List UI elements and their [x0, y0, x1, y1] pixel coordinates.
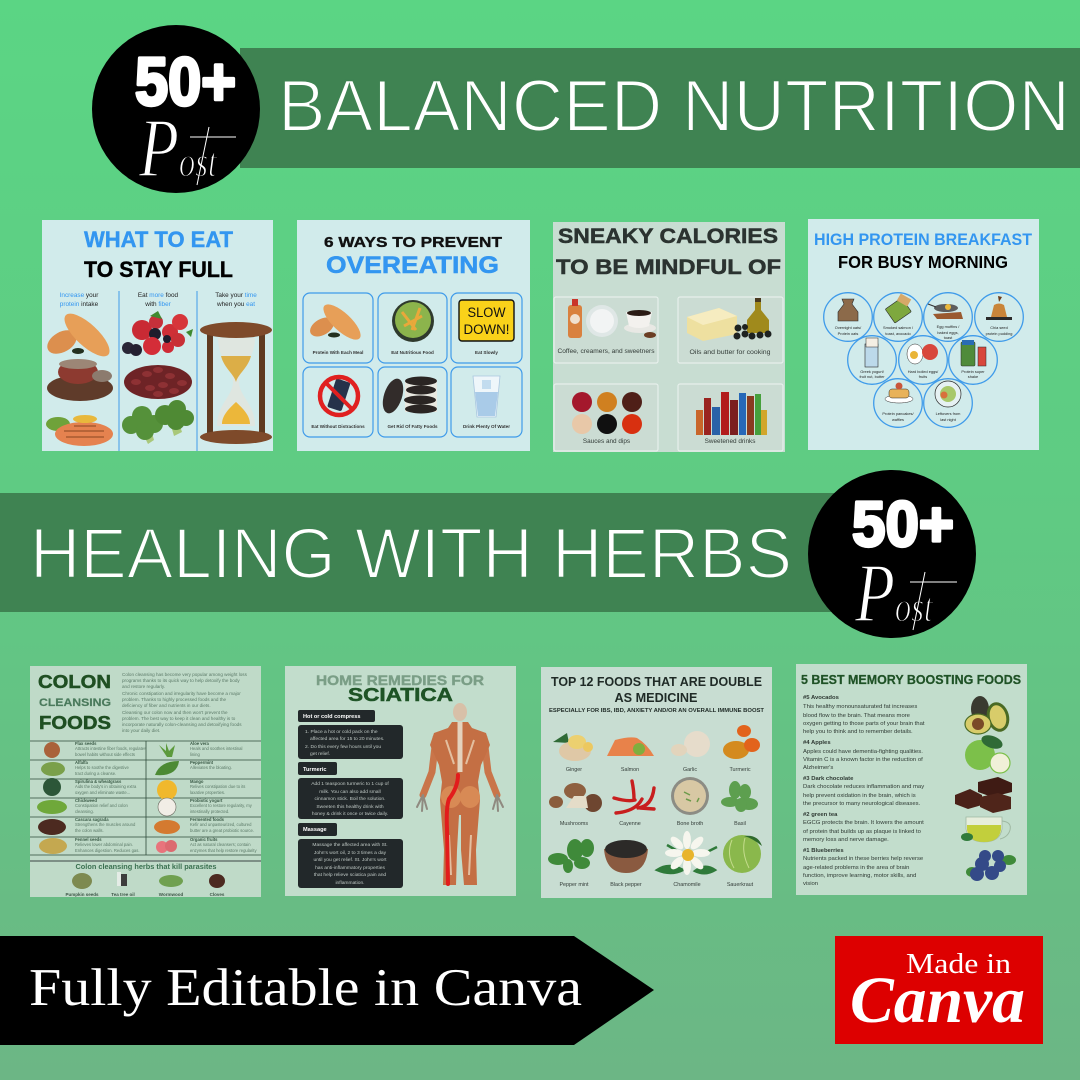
text list: help prevent oxidation in the brain, which is: [803, 793, 916, 799]
circle labels: Chia seed: [990, 325, 1008, 330]
remedy: turmeric: [298, 762, 403, 819]
heading: to stay full: TO STAY FULL: [84, 257, 233, 282]
text list: help you to think and to remember details.: [803, 729, 913, 735]
intro paragraph: Colon cleansing has become very popular among weight loss: [122, 672, 248, 677]
table text: intestinally protected.: [190, 809, 229, 814]
text list: [803, 695, 925, 887]
card labels: Drink Plenty Of Water: [463, 424, 510, 429]
icon: green tea: [961, 817, 1010, 842]
badge: made in canva: Made in: [906, 949, 1011, 980]
heading: what to eat: WHAT TO EAT: [84, 227, 234, 252]
remedy: massage: Massage the affected area with St.: [312, 842, 388, 848]
food labels: Garlic: [683, 767, 697, 773]
intro paragraph: incorporate naturally colon-cleansing and detoxifying foods: [122, 722, 242, 727]
herb labels: Cloves: [210, 892, 225, 897]
panel: sneaky calories: [553, 222, 785, 452]
herb labels: Tea tree oil: [111, 892, 135, 897]
remedy: hot or cold compress: [298, 710, 403, 759]
remedy: turmeric: cinnamon stick. Boil the solution.: [315, 796, 385, 802]
table text: Flax seeds: [75, 741, 97, 746]
card labels: Eat Without Distractions: [311, 424, 365, 429]
panel: high protein breakfast: [808, 219, 1039, 450]
icon: salmon: [607, 737, 654, 756]
circle labels: Overnight oats/: [835, 325, 862, 330]
table text: butter are a great probiotic source.: [190, 828, 254, 833]
heading: memory boosting foods: 5 BEST MEMORY BOOSTING FOODS: [801, 673, 1021, 687]
circle labels: last night: [940, 417, 957, 422]
remedy: massage: has anti-inflammatory properties: [315, 865, 385, 871]
remedy: hot or cold compress: 2. Do this every few hours until you: [305, 744, 381, 750]
icon: mushrooms: [549, 783, 602, 812]
card labels: Oils and butter for cooking: [690, 349, 771, 356]
food labels: Mushrooms: [560, 821, 588, 827]
circle labels: toast: [944, 335, 953, 340]
badge: 50+ post middle: 50+: [852, 488, 954, 560]
food labels: Bone broth: [677, 821, 703, 827]
badge: 50+ post top: [92, 25, 260, 195]
herb labels: Wormwood: [159, 892, 183, 897]
badge: 50+ post middle: [808, 470, 976, 640]
table text: lining: [190, 752, 200, 757]
table text: Aloe vera: [190, 741, 210, 746]
food labels: Turmeric: [729, 767, 751, 773]
header banner: balanced nutrition: [240, 48, 1080, 168]
icon: steak: [47, 359, 113, 401]
heading: high protein breakfast: HIGH PROTEIN BREAKFAST: [814, 230, 1033, 249]
herb icons: [72, 872, 225, 889]
icon: pudding: [986, 296, 1012, 320]
table text: Enhances digestion. Reduces gas.: [75, 848, 139, 853]
text list: Alzheimer's: [803, 765, 833, 771]
text list: This healthy monounsaturated fat increases: [803, 704, 917, 710]
table text: Organic fruits: [190, 837, 218, 842]
heading: overeating: OVEREATING: [326, 252, 499, 279]
text list: #5 Avocados: [803, 695, 840, 701]
remedy: turmeric: honey & drink it once or twice daily.: [312, 811, 388, 817]
text list: blood flow to the brain. That means more: [803, 713, 911, 719]
intro paragraph: problem. Thanks to highly processed foods and the: [122, 697, 227, 702]
panel: memory boosting foods: [796, 664, 1027, 895]
remedy: hot or cold compress: get relief.: [310, 751, 330, 757]
food labels: Cayenne: [619, 821, 641, 827]
text list: the precursor to many neurological diseases.: [803, 801, 921, 807]
panel: colon cleansing foods: [30, 666, 261, 897]
intro paragraph: deficiency of fiber and nutrients in our diets.: [122, 703, 211, 708]
text list: age-related problems in the area of brain: [803, 865, 909, 871]
circle labels: fruits: [919, 374, 927, 379]
icon: slow down sign: [459, 300, 514, 341]
icon: slow down sign: SLOW: [468, 305, 506, 320]
heading: to be mindful of: TO BE MINDFUL OF: [556, 256, 781, 279]
circle labels: Smoked salmon /: [883, 325, 914, 330]
food labels: Chamomile: [673, 882, 701, 888]
circle labels: Protein oats: [838, 331, 858, 336]
table text: enzymes that help restore regularity: [190, 848, 257, 853]
heading: healing with herbs: HEALING WITH HERBS: [30, 515, 792, 594]
icon: egg and apple: [907, 344, 938, 364]
text list: of protein that builds up as plaque is linked to: [803, 829, 922, 835]
icon: pancakes: [885, 382, 913, 403]
column headings: protein intake: [60, 301, 99, 308]
icon: blueberries: [966, 850, 1016, 881]
icon: yogurt glass: [865, 338, 878, 367]
card labels: [558, 348, 771, 445]
remedy: massage: [298, 823, 403, 888]
icon: chocolate: [955, 777, 1012, 813]
icon: apple: [965, 733, 1010, 773]
card labels: Eat Nutritious Food: [391, 350, 434, 355]
column headings: Take your time: [215, 292, 257, 299]
heading: sneaky calories: SNEAKY CALORIES: [558, 225, 778, 248]
icon: slow down sign: DOWN!: [464, 322, 510, 337]
icon: salmon garnish: [633, 743, 645, 755]
illustration: muscular body with sciatic nerve: [417, 703, 503, 885]
remedy: turmeric: milk. You can also add small: [319, 789, 381, 795]
cards: [303, 293, 522, 437]
header banner: healing with herbs: [0, 493, 835, 612]
icon: garlic: [671, 731, 710, 757]
table text: Fermented foods: [190, 817, 225, 822]
heading: herbs that kill parasites: Colon cleansing herbs that kill parasites: [76, 862, 216, 871]
table text: bowel habits without side effects: [75, 752, 135, 757]
table text: Alleviates the bloating.: [190, 765, 232, 770]
badge: made in canva: [835, 936, 1043, 1044]
herb labels: [65, 892, 225, 897]
table text: cleansing.: [75, 809, 94, 814]
column headings: Eat more food: [138, 292, 179, 299]
badge: made in canva: Canva: [850, 964, 1025, 1037]
circle labels: Egg muffins /: [937, 324, 960, 329]
food labels: [559, 767, 754, 888]
table text: laxative properties.: [190, 790, 225, 795]
column headings: with fiber: [144, 301, 172, 308]
icon: avocado: [965, 696, 1013, 734]
icon: chicken: [43, 307, 116, 363]
intro paragraph: Cleansing our colon now and then won't prevent the: [122, 710, 228, 715]
table text: Aids the body's in obtaining extra: [75, 784, 137, 789]
heading: balanced nutrition: BALANCED NUTRITION: [278, 66, 1070, 147]
card labels: Get Rid Of Fatty Foods: [387, 424, 438, 429]
icon: no phone: [320, 377, 358, 415]
icon: black pepper: [604, 840, 648, 873]
remedy: turmeric: Sweeten this healthy drink with: [316, 804, 384, 810]
column headings: Increase your: [60, 292, 99, 299]
heading: top 12 foods: AS MEDICINE: [614, 691, 698, 705]
remedy: massage: until you get relief. St. John's wort: [314, 857, 387, 863]
text list: Nutrients packed in these berries help reverse: [803, 856, 924, 862]
text list: EGCG protects the brain. It lowers the amount: [803, 820, 924, 826]
card labels: [311, 350, 510, 429]
arrow banner: fully editable in canva: Fully Editable in Canva: [29, 959, 582, 1017]
remedy: massage: John's wort oil, 2 to 3 times a day: [314, 850, 387, 856]
icon: water glass: [473, 376, 500, 417]
cards: [554, 297, 783, 451]
table text: Alfalfa: [75, 760, 88, 765]
remedy: hot or cold compress: 1. Place a hot or cold pack on the: [305, 729, 378, 735]
food labels: Ginger: [566, 767, 582, 773]
text list: memory loss and nerve damage.: [803, 837, 889, 843]
table text: Relives constipation due to its: [190, 784, 245, 789]
table text: tract during a cleanse.: [75, 771, 116, 776]
remedy: hot or cold compress: Hot or cold compress: [303, 714, 361, 720]
intro paragraph: Chronic constipation and irregularity have become a major: [122, 691, 241, 696]
subtitle: ESPECIALLY FOR IBS, IBD, ANXIETY AND/OR AN OVERALL IMMUNE BOOST: [549, 708, 765, 714]
heading: home remedies for: HOME REMEDIES FOR: [316, 672, 484, 688]
intro paragraph: problem. The best way to keep it clean and healthy is to: [122, 716, 236, 721]
icon: turmeric: [723, 725, 760, 759]
icon: berries: [122, 311, 193, 356]
intro paragraph: and restore regularly.: [122, 684, 165, 689]
arrow banner: fully editable in canva: [0, 936, 654, 1045]
card labels: Eat Slowly: [475, 350, 498, 355]
table food icons: [37, 742, 180, 854]
table text: Spirulina & wheatgrass: [75, 779, 122, 784]
circle labels: shake: [968, 374, 978, 379]
icon: salmon: [46, 415, 113, 446]
circle labels: toast, avocado: [885, 331, 911, 336]
icon: coffee and sugar: [568, 299, 656, 338]
intro paragraph: into your daily diet.: [122, 728, 160, 733]
icon: cookies: [379, 376, 437, 416]
icon: basil: [721, 781, 758, 812]
table text: the colon walls.: [75, 828, 104, 833]
table text: [75, 741, 257, 853]
icon: sweetened drinks: [696, 392, 767, 435]
table text: Relieves lower abdominal pain.: [75, 842, 133, 847]
icon: broccoli: [122, 400, 194, 444]
icon: chicken: [307, 299, 366, 345]
table text: Chickweed: [75, 798, 97, 803]
intro paragraph: programs thanks to its quick way to help detoxify the body: [122, 678, 240, 683]
card labels: Protein With Each Meal: [313, 350, 363, 355]
table text: Heals and soothes intestinal: [190, 746, 242, 751]
badge: 50+ post top: Post: [138, 102, 218, 195]
table text: Mango: [190, 779, 204, 784]
circle labels: protein pudding: [986, 331, 1012, 336]
table text: Strengthens the muscles around: [75, 822, 136, 827]
text list: Apples could have dementia-fighting qualities.: [803, 749, 923, 755]
heading: colon cleansing foods: FOODS: [39, 713, 111, 733]
remedy: hot or cold compress: affected area for 15 to 20 minutes.: [310, 736, 384, 742]
circle labels: Hard boiled eggs/: [908, 369, 939, 374]
badge: 50+ post middle: Post: [854, 547, 934, 640]
icon: butter and oil: [687, 298, 772, 341]
table text: Attracts intestine fiber foods, regulates: [75, 746, 146, 751]
card labels: Sweetened drinks: [705, 438, 755, 445]
remedy: massage: inflammation.: [335, 880, 365, 886]
heading: colon cleansing foods: [38, 672, 111, 733]
icon: oats sack: [838, 299, 858, 321]
icon: protein shake: [961, 340, 986, 366]
icon: cabbage: [723, 835, 762, 873]
text list: #2 green tea: [803, 812, 838, 818]
text list: #3 Dark chocolate: [803, 776, 854, 782]
card labels: Coffee, creamers, and sweetners: [558, 348, 654, 355]
text list: vision: [803, 881, 818, 887]
icon: salad: [392, 300, 434, 342]
table text: Kefir and unpasteurized, cultured: [190, 822, 252, 827]
card labels: Sauces and dips: [583, 438, 630, 445]
icon: chamomile: [657, 831, 717, 875]
text list: oxygen getting to those parts of your brain that: [803, 721, 925, 727]
remedy: massage: Massage: [303, 827, 327, 833]
food labels: Salmon: [621, 767, 639, 773]
heading: colon cleansing foods: CLEANSING: [39, 697, 111, 709]
text list: function, improve learning, motor skills, and: [803, 873, 916, 879]
remedy: turmeric: Turmeric: [303, 767, 327, 773]
table text: Cascara sagrada: [75, 817, 109, 822]
circle labels: Protein super: [961, 369, 985, 374]
remedy: massage: that help relieve sciatica pain and: [314, 872, 386, 878]
heading: sciatica: SCIATICA: [348, 685, 453, 705]
icon: bone broth: [671, 777, 709, 815]
table text: Act as natural cleansers; contain: [190, 842, 251, 847]
table text: Probiotic yogurt: [190, 798, 223, 803]
heading: top 12 foods: [551, 675, 762, 705]
intro paragraph: [122, 672, 248, 733]
panel: top 12 foods: [541, 667, 772, 898]
circle labels: fruit nut, butter: [859, 374, 885, 379]
heading: top 12 foods: TOP 12 FOODS THAT ARE DOUBLE: [551, 675, 762, 689]
icon: cayenne: [614, 781, 654, 813]
table text: Excellent to restore regularity, my: [190, 803, 253, 808]
text list: Dark chocolate reduces inflammation and may: [803, 784, 924, 790]
heading: for busy morning: FOR BUSY MORNING: [838, 252, 1008, 272]
circle rings: [824, 293, 1023, 427]
food labels: Basil: [734, 821, 746, 827]
icon: ginger: [553, 733, 593, 761]
column headings: when you eat: [216, 301, 255, 308]
icon: egg pan: [928, 304, 963, 319]
food labels: Sauerkraut: [727, 882, 754, 888]
circle labels: Greek yogurt/: [860, 369, 885, 374]
text list: #1 Blueberries: [803, 848, 844, 854]
remedy: turmeric: Add 1 teaspoon turmeric to 1 cup of: [311, 781, 389, 787]
table text: Constipation relief and colon: [75, 803, 129, 808]
column headings: [60, 292, 257, 308]
icon: beans: [124, 365, 192, 399]
circle labels: waffles: [892, 417, 904, 422]
table text: Peppermint: [190, 760, 214, 765]
icon: leftovers plate: [935, 381, 961, 407]
panel: home remedies for sciatica: [285, 666, 516, 896]
table text: Helps to soothe the digestive: [75, 765, 129, 770]
table text: Fennel seeds: [75, 837, 102, 842]
text list: Vitamin C is a known factor in the reduction of: [803, 757, 923, 763]
badge: 50+ post top: 50+: [135, 44, 236, 120]
table text: oxygen and eliminate waste...: [75, 790, 130, 795]
icon: toast: [885, 294, 911, 323]
heading: 6 ways to prevent: 6 WAYS TO PREVENT: [324, 234, 502, 251]
food labels: Black pepper: [610, 882, 642, 888]
text list: #4 Apples: [803, 740, 831, 746]
food labels: Pepper mint: [559, 882, 589, 888]
panel: 6 ways to prevent overeating: [297, 220, 530, 451]
icon: peppermint: [548, 839, 594, 873]
icon: sauces: [572, 392, 642, 434]
circle labels: baked eggs,: [937, 330, 959, 335]
circle labels: Leftovers from: [936, 411, 960, 416]
heading: colon cleansing foods: COLON: [38, 672, 111, 692]
circle labels: [835, 324, 1012, 422]
icon: hourglass: [200, 322, 272, 444]
panel: what to eat to stay full: [42, 220, 273, 451]
herb labels: Pumpkin seeds: [65, 892, 99, 897]
circle labels: Protein pancakes/: [882, 411, 914, 416]
